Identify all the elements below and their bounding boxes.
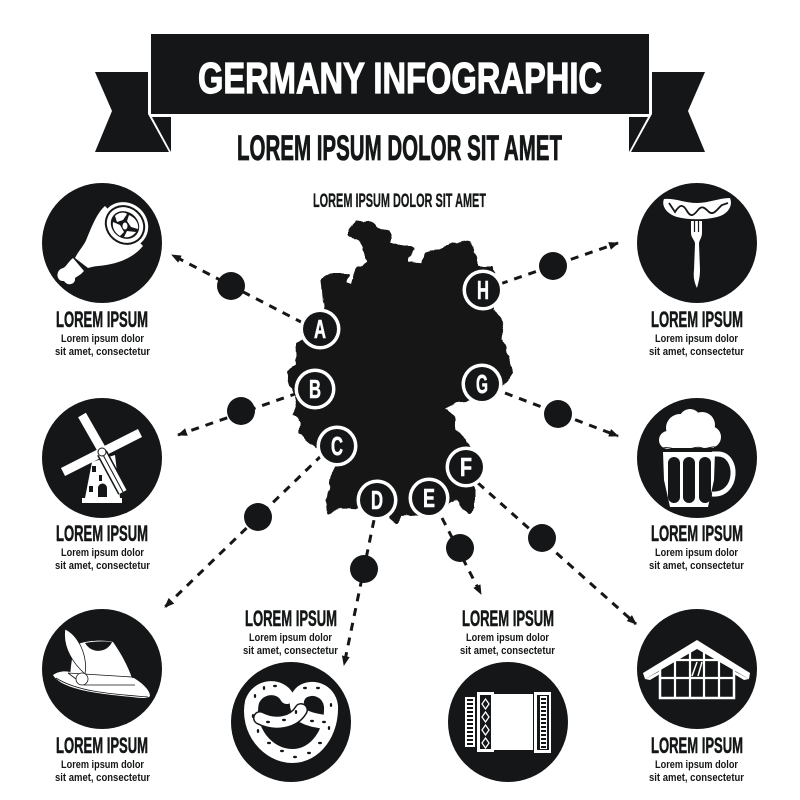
description: Lorem ipsum dolor <box>655 759 739 771</box>
marker H: H <box>477 275 489 305</box>
description: sit amet, consectetur <box>55 772 151 784</box>
icon: hat <box>42 609 162 729</box>
description: sit amet, consectetur <box>55 346 151 358</box>
label: LOREM IPSUM <box>462 606 554 631</box>
map heading: LOREM IPSUM DOLOR SIT AMET <box>313 191 486 212</box>
panel: accordion <box>448 606 568 782</box>
description: sit amet, consectetur <box>460 645 556 657</box>
description: sit amet, consectetur <box>649 346 745 358</box>
description: Lorem ipsum dolor <box>655 333 739 345</box>
marker E: E <box>423 483 435 513</box>
icon: pretzel <box>231 662 351 782</box>
description: Lorem ipsum dolor <box>466 632 550 644</box>
connector E <box>442 518 481 594</box>
marker C <box>316 426 358 466</box>
title banner <box>95 34 705 152</box>
connector C <box>165 455 322 607</box>
panel: house <box>637 609 757 784</box>
label: LOREM IPSUM <box>245 606 337 631</box>
marker C: C <box>331 431 343 461</box>
connector F <box>478 483 636 624</box>
label: LOREM IPSUM <box>56 521 148 546</box>
description <box>55 547 151 572</box>
connector H <box>500 243 618 284</box>
label: LOREM IPSUM <box>56 307 148 332</box>
icon: windmill <box>42 398 162 518</box>
icon: timber house <box>637 609 757 729</box>
marker F: F <box>460 452 472 482</box>
panel: ham <box>42 183 162 358</box>
panel: pretzel <box>231 606 351 782</box>
connector A <box>172 255 303 323</box>
panel: sausage <box>637 183 757 358</box>
title: GERMANY INFOGRAPHIC <box>198 54 602 103</box>
map of Germany <box>288 222 511 522</box>
marker B <box>294 368 336 410</box>
panel: hat <box>42 609 162 784</box>
description <box>649 547 745 572</box>
description: sit amet, consectetur <box>243 645 339 657</box>
marker D: D <box>371 485 383 515</box>
marker D <box>356 480 398 520</box>
connector B <box>178 393 298 435</box>
marker H <box>462 270 504 310</box>
marker F <box>446 446 486 488</box>
marker A: A <box>314 314 326 344</box>
icon: accordion <box>448 662 568 782</box>
description <box>649 333 745 358</box>
marker E <box>408 478 450 518</box>
description <box>55 333 151 358</box>
description: Lorem ipsum dolor <box>61 547 145 559</box>
icon: ham <box>42 183 162 303</box>
panel: windmill <box>42 398 162 572</box>
icon: sausage on fork <box>637 183 757 303</box>
marker G: G <box>476 369 488 399</box>
description <box>460 632 556 657</box>
description: sit amet, consectetur <box>649 560 745 572</box>
description <box>243 632 339 657</box>
description: Lorem ipsum dolor <box>61 333 145 345</box>
icon: beer mug <box>637 398 757 518</box>
description: Lorem ipsum dolor <box>655 547 739 559</box>
description <box>649 759 745 784</box>
description: sit amet, consectetur <box>649 772 745 784</box>
description: sit amet, consectetur <box>55 560 151 572</box>
label: LOREM IPSUM <box>56 733 148 758</box>
panel: beer <box>637 398 757 572</box>
description: Lorem ipsum dolor <box>249 632 333 644</box>
connector D <box>344 520 378 665</box>
marker G <box>462 364 502 404</box>
marker B: B <box>309 374 321 404</box>
description <box>55 759 151 784</box>
marker A <box>300 308 340 350</box>
description: Lorem ipsum dolor <box>61 759 145 771</box>
connector G <box>505 393 618 436</box>
subtitle: LOREM IPSUM DOLOR SIT AMET <box>237 129 562 168</box>
